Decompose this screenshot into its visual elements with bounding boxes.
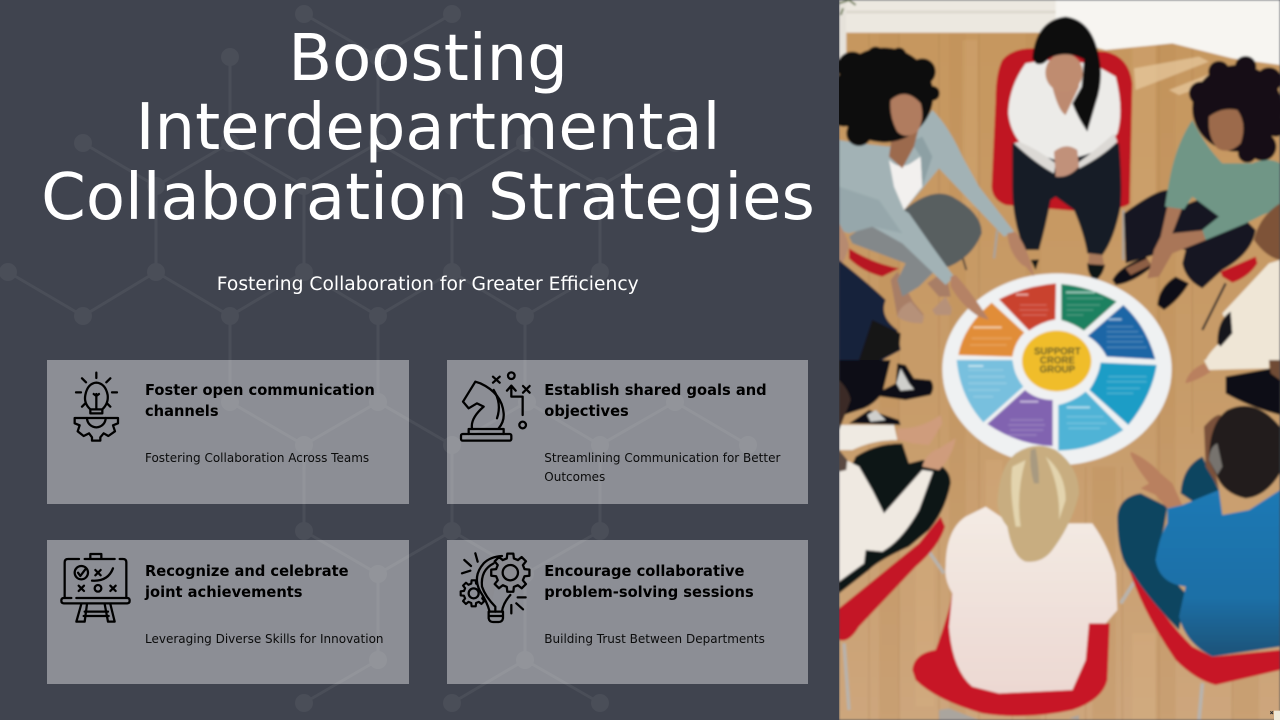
wheel mat: CRORE [1040,356,1075,367]
panel: encourage problem-solving [447,540,808,684]
icon: lightbulb over gear [74,372,120,442]
card heading: problem-solving sessions [544,584,754,601]
card heading [544,382,767,420]
lower-left dark-clothed person [839,223,901,360]
card description: Building Trust Between Departments [544,632,765,646]
card description: Leveraging Diverse Skills for Innovation [145,632,384,646]
card heading: joint achievements [145,584,302,601]
left woman with afro and cardigan [831,47,1034,323]
photo: group seated in circle around wheel [839,0,1280,720]
card heading: Foster open communication [145,382,375,399]
card description: Streamlining Communication for Better Outcomes [544,451,780,484]
man in blue sweater from behind on red chair [1117,360,1280,720]
card heading: Recognize and celebrate [145,563,349,580]
top chair and woman in white [992,17,1132,281]
panel: establish shared goals [447,360,808,504]
wheel mat: GROUP [1040,365,1076,376]
lower half of photo [839,360,1280,720]
card heading: channels [145,403,219,420]
wall and curtain [839,0,1280,95]
icon: chess knight with strategy arrow [460,371,531,442]
title: Collaboration Strategies [41,161,815,235]
card heading [145,382,375,420]
icon: lightbulb with gears [460,552,531,624]
wheel mat: SUPPORT [1034,347,1081,358]
card heading: Establish shared goals and [544,382,767,399]
panel: foster open communication [47,360,409,504]
panel: recognize and celebrate [47,540,409,684]
watermark mark [1270,711,1280,720]
woman in white on the left and red chair [839,360,956,710]
title: Interdepartmental [136,91,720,165]
icon: strategy board on easel [60,552,131,623]
title [41,22,815,235]
card heading [144,563,349,601]
wheel mat [942,273,1172,465]
blonde woman from behind on red chair [912,446,1117,720]
green sweater woman [1112,56,1280,330]
subtitle: Fostering Collaboration for Greater Efficiency [217,274,639,295]
card heading [544,563,754,601]
card heading: objectives [544,403,629,420]
card description: Fostering Collaboration Across Teams [145,451,369,465]
card heading: Encourage collaborative [544,563,744,580]
right woman in cream sweater [1206,203,1280,360]
title: Boosting [288,22,568,96]
